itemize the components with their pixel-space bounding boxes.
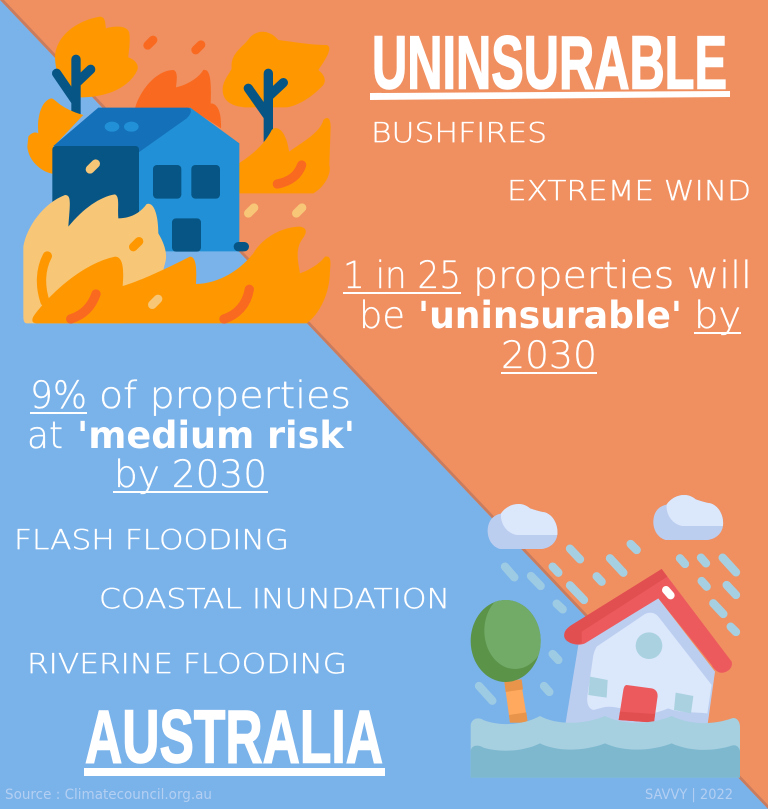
icon: house on fire	[23, 17, 331, 323]
statistic: 9% medium risk: of properties	[99, 374, 351, 417]
house left wall	[52, 146, 139, 251]
statistic: 1 in 25 uninsurable: by	[694, 294, 741, 337]
light sparks	[90, 164, 302, 213]
tree crown	[470, 600, 541, 682]
statistic: 9% medium risk: 'medium risk'	[77, 414, 355, 457]
credit: SAVVY | 2022	[645, 787, 733, 803]
right bush flame	[233, 118, 331, 193]
centre flame	[135, 70, 221, 128]
main orange flame	[32, 227, 330, 323]
heading: australia	[84, 694, 385, 778]
right tree foliage	[223, 32, 329, 107]
statistic: 9% medium risk: by 2030	[114, 453, 267, 496]
house right wall	[138, 107, 239, 251]
statistic: 1 in 25 uninsurable: properties will	[473, 254, 752, 297]
cloud right	[653, 495, 723, 540]
right tree trunk	[248, 73, 283, 142]
tree trunk	[504, 679, 528, 723]
label: riverine flooding: RIVERINE FLOODING	[27, 648, 347, 680]
left tree foliage	[55, 17, 138, 97]
source note: Source : Climatecouncil.org.au	[5, 787, 212, 803]
label: flash flooding: FLASH FLOODING	[14, 524, 289, 556]
label: bushfires: BUSHFIRES	[371, 117, 547, 149]
statistic: 1 in 25 uninsurable: be	[359, 294, 405, 337]
cloud left	[488, 504, 557, 549]
statistic: 9% medium risk: at	[27, 414, 63, 457]
windows and door	[153, 165, 181, 199]
roof vents	[105, 122, 119, 132]
statistic: 1 in 25 uninsurable: 'uninsurable'	[418, 294, 682, 337]
heading: australia: AUSTRALIA	[85, 694, 383, 778]
water	[471, 716, 740, 778]
round window	[636, 632, 662, 659]
label: extreme wind: EXTREME WIND	[507, 175, 751, 207]
roof	[564, 569, 732, 673]
rain	[553, 544, 736, 632]
house roof	[53, 108, 191, 153]
statistic: 1 in 25 uninsurable: 2030	[501, 334, 597, 377]
statistic: 1 in 25 uninsurable	[343, 254, 752, 377]
door	[619, 685, 658, 723]
house wall	[565, 598, 715, 727]
left tree trunk	[57, 59, 91, 115]
statistic: 9% medium risk: 9%	[30, 374, 87, 417]
icon: flooded house	[471, 495, 740, 778]
windows	[588, 677, 608, 698]
statistic: 1 in 25 uninsurable: 1 in 25	[343, 254, 461, 297]
sparks	[148, 40, 201, 50]
left bush flame	[27, 98, 83, 174]
statistic: 9% medium risk	[27, 374, 355, 496]
label: coastal inundation: COASTAL INUNDATION	[99, 583, 450, 615]
yellow flame	[23, 194, 166, 323]
